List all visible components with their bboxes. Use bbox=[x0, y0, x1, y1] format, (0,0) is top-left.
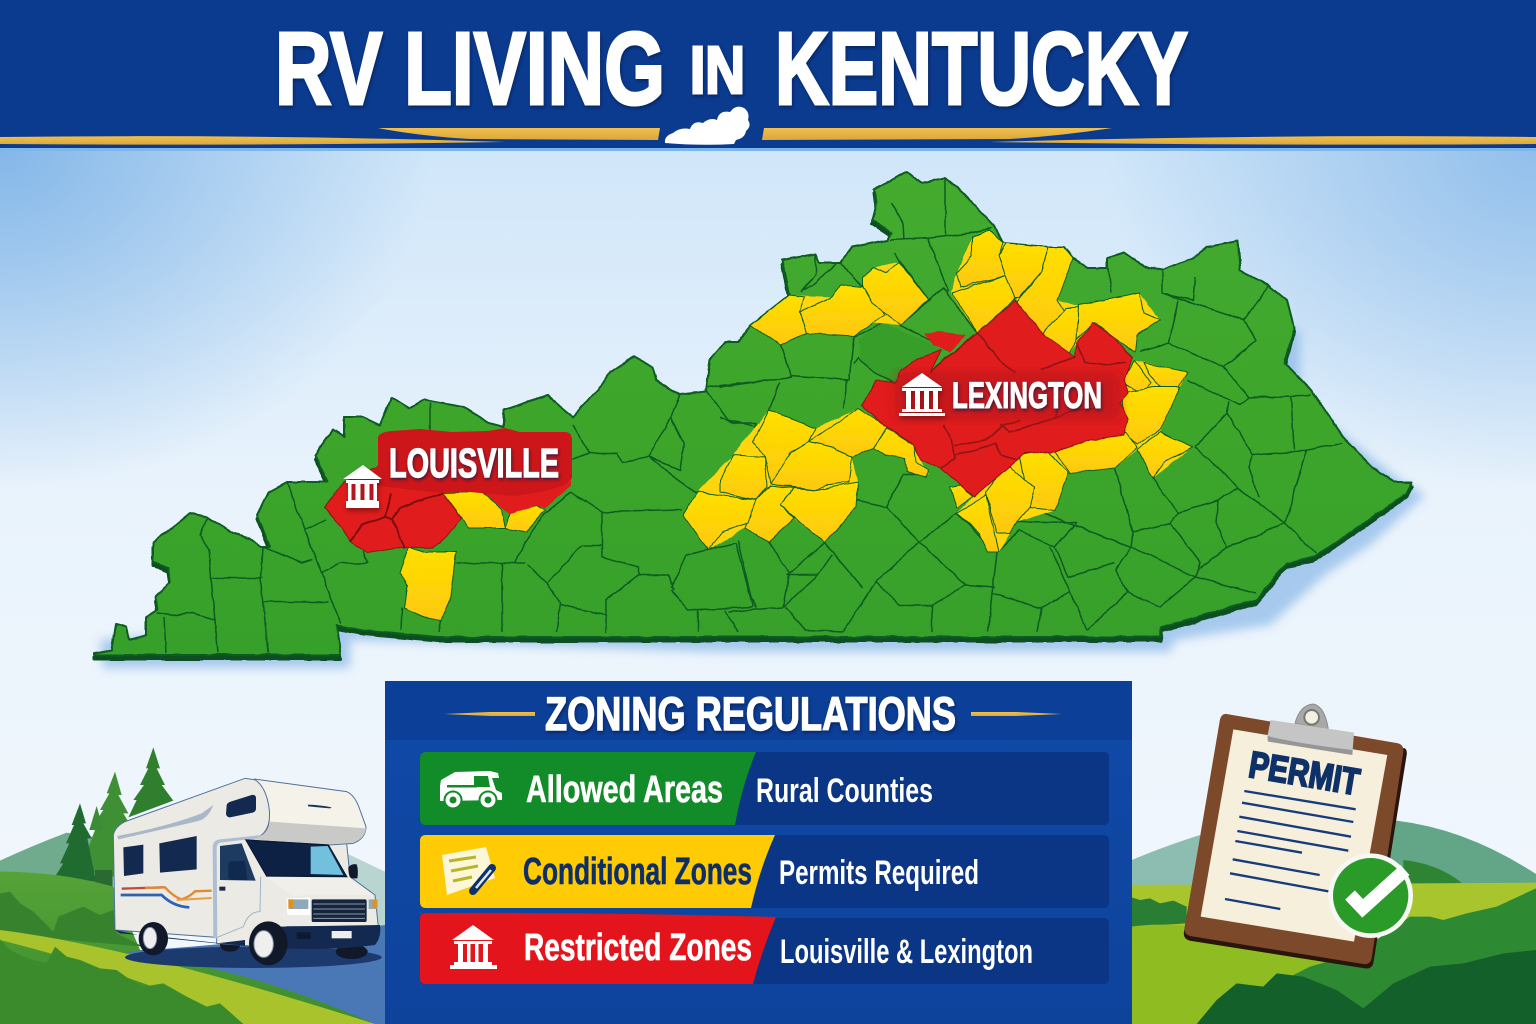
row: allowed areas bbox=[420, 752, 1109, 825]
clip bbox=[1295, 704, 1328, 729]
cab door window bbox=[220, 843, 256, 881]
row label: Restricted Zones bbox=[524, 927, 752, 969]
dark green woodland bbox=[1197, 888, 1536, 1024]
row description: Rural Counties bbox=[756, 772, 933, 810]
landscape: left hills and RV bbox=[0, 747, 385, 1024]
wheels bbox=[139, 921, 288, 965]
text lines bbox=[1225, 791, 1356, 909]
distant hills bbox=[1132, 835, 1200, 890]
door frame strip bbox=[213, 835, 262, 938]
title bbox=[275, 11, 1188, 126]
side windows bbox=[123, 836, 197, 876]
icon: courthouse bbox=[343, 465, 382, 508]
bushes bbox=[0, 892, 143, 947]
red restricted zone: Louisville bbox=[324, 430, 571, 553]
row: conditional zones bbox=[420, 835, 1109, 908]
label: Louisville bbox=[343, 428, 572, 508]
row: restricted zones bbox=[420, 913, 1109, 984]
body bbox=[113, 778, 378, 947]
Kentucky county map bbox=[94, 171, 1412, 659]
header banner bbox=[0, 0, 1536, 151]
title: RV LIVING bbox=[275, 11, 665, 126]
title: IN bbox=[690, 33, 745, 108]
cab-over bbox=[247, 779, 366, 845]
red area north of Lexington bbox=[923, 332, 966, 352]
panel heading rules bbox=[444, 712, 1062, 716]
row description: Louisville & Lexington bbox=[780, 933, 1033, 971]
headlights bbox=[287, 898, 310, 915]
icon: green check badge bbox=[1328, 853, 1413, 938]
paper bbox=[1201, 729, 1387, 942]
county borders bbox=[157, 178, 1343, 653]
yellow cluster underlays bbox=[683, 230, 1193, 552]
grille bbox=[312, 899, 367, 922]
row label: Allowed Areas bbox=[526, 769, 723, 811]
yellow-green verge bbox=[0, 930, 375, 1024]
foreground bush bbox=[0, 939, 243, 1024]
panel header band bbox=[385, 681, 1132, 740]
gold swooshes bbox=[0, 128, 1536, 145]
icon: courthouse bbox=[899, 373, 945, 416]
panel heading: ZONING REGULATIONS bbox=[545, 687, 956, 740]
map shadow bbox=[100, 330, 1425, 668]
title: KENTUCKY bbox=[775, 11, 1188, 126]
label: Lexington bbox=[895, 372, 1120, 420]
stripes bbox=[122, 887, 163, 889]
grass hill bbox=[0, 872, 383, 1024]
row label: Conditional Zones bbox=[523, 851, 752, 893]
icon: courthouse bbox=[450, 925, 497, 969]
RV bbox=[113, 778, 382, 968]
map base: green counties bbox=[94, 171, 1412, 659]
windshield bbox=[246, 840, 347, 877]
trees bbox=[55, 747, 173, 887]
hood bbox=[267, 877, 374, 896]
board bbox=[1184, 717, 1407, 968]
road bbox=[123, 925, 385, 1024]
label text: LEXINGTON bbox=[952, 375, 1102, 416]
icon: note and pen bbox=[442, 847, 495, 895]
shadow bbox=[125, 947, 382, 968]
clipboard bbox=[1184, 704, 1407, 968]
distant hills bbox=[0, 833, 113, 887]
permit text: PERMIT bbox=[1246, 743, 1363, 803]
panel: zoning regulations bbox=[385, 681, 1132, 1024]
bumper bbox=[280, 925, 380, 949]
icon: Kentucky cloud bbox=[665, 107, 750, 145]
roof ledge bbox=[117, 805, 213, 839]
fields bbox=[1132, 883, 1536, 930]
yellow conditional counties bbox=[400, 230, 1193, 620]
label background bbox=[358, 428, 572, 496]
label text: LOUISVILLE bbox=[389, 440, 559, 486]
rear wheel far bbox=[220, 938, 240, 952]
row description: Permits Required bbox=[779, 854, 979, 892]
mirror bbox=[348, 864, 358, 878]
icon: van bbox=[440, 771, 502, 808]
landscape: right hills and permit bbox=[1132, 704, 1536, 1024]
red restricted zone: Lexington bbox=[862, 300, 1133, 497]
label glow bbox=[895, 372, 1120, 420]
